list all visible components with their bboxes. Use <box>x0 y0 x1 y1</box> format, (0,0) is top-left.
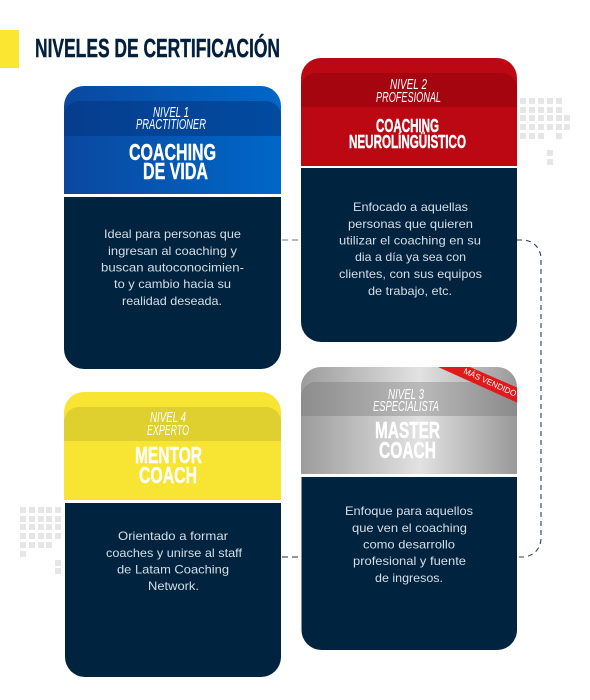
level 2 name: COACHING <box>376 116 439 136</box>
level 4 band <box>64 407 281 441</box>
level 1 label <box>136 104 206 133</box>
level 1 body panel <box>64 197 281 369</box>
yellow title marker <box>0 30 19 68</box>
panel: level 4 experto <box>64 392 281 677</box>
level 1 description: to y cambio hacia su <box>114 278 231 291</box>
dashed connector: level 3 to level 4 <box>282 556 301 558</box>
level 4 body panel <box>65 503 281 677</box>
level 4 description: Orientado a formar <box>118 530 228 543</box>
level 2 label <box>376 76 441 106</box>
level 1 header <box>64 86 281 194</box>
level 2 body panel <box>301 168 517 342</box>
level 4 label: NIVEL 4 <box>150 409 186 426</box>
level 2 description: Enfocado a aquellas <box>353 201 468 214</box>
level 3 description: que ven el coaching <box>352 522 467 535</box>
level 4 description: Network. <box>148 580 199 593</box>
level 3 name: MASTER <box>375 417 440 443</box>
level 3 label: NIVEL 3 <box>388 386 424 403</box>
level 3 label <box>373 386 439 415</box>
level 2 description <box>339 201 482 298</box>
level 2 description: clientes, con sus equipos <box>339 268 482 281</box>
panel: level 3 especialista <box>301 366 518 650</box>
level 1 description: buscan autoconocimien- <box>101 262 244 274</box>
level 1 name: DE VIDA <box>143 158 208 184</box>
level 3 label: ESPECIALISTA <box>373 398 439 415</box>
best seller ribbon <box>438 366 518 403</box>
level 4 description: de Latam Coaching <box>117 564 229 576</box>
level 1 name: COACHING <box>129 139 216 165</box>
level 1 description: ingresan al coaching y <box>108 245 237 258</box>
level 4 label <box>147 409 189 439</box>
panel: level 2 profesional <box>301 58 517 342</box>
level 4 header <box>64 392 281 500</box>
level 3 body panel <box>302 477 517 650</box>
best seller ribbon: MÁS VENDIDO <box>462 366 518 398</box>
level 2 description: de trabajo, etc. <box>368 285 452 298</box>
level 3 description: profesional y fuente <box>353 555 466 568</box>
level 1 description: realidad deseada. <box>122 295 222 308</box>
panel: level 1 practitioner <box>64 86 281 369</box>
level 1 label: PRACTITIONER <box>136 116 206 133</box>
level 3 name <box>375 417 440 463</box>
level 1 band <box>64 101 281 136</box>
level 3 band <box>301 382 517 416</box>
level 2 name: NEUROLÍNGÜISTICO <box>349 131 466 152</box>
level 2 name <box>349 116 466 152</box>
level 2 label: PROFESIONAL <box>376 89 441 106</box>
level 4 name: MENTOR <box>135 442 202 468</box>
level 1 name <box>129 139 216 184</box>
level 4 description: coaches y unirse al staff <box>106 547 243 560</box>
level 1 description <box>101 228 244 308</box>
level 3 name: COACH <box>379 437 436 463</box>
dot pattern: top right <box>520 98 570 165</box>
level 2 description: personas que quieren <box>348 218 473 231</box>
level 3 description: de ingresos. <box>375 572 443 585</box>
level 3 description <box>345 505 473 585</box>
dashed connector: level 1 to level 2 <box>282 239 301 241</box>
level 2 band <box>301 73 517 107</box>
level 4 label: EXPERTO <box>147 422 189 439</box>
title: NIVELES DE CERTIFICACIÓN <box>35 33 280 63</box>
level 1 description: Ideal para personas que <box>104 228 241 241</box>
level 3 header <box>301 367 517 474</box>
dashed connector: level 2 to level 3 <box>517 240 541 557</box>
level 4 name: COACH <box>139 462 197 488</box>
level 2 header <box>301 58 517 166</box>
level 4 name <box>135 442 202 488</box>
level 2 label: NIVEL 2 <box>390 76 427 93</box>
level 4 description <box>106 530 243 593</box>
level 3 description: como desarrollo <box>363 538 456 552</box>
dot pattern: bottom left <box>20 507 61 574</box>
level 2 description: utilizar el coaching en su <box>339 234 481 248</box>
level 3 description: Enfoque para aquellos <box>345 505 473 518</box>
level 1 label: NIVEL 1 <box>153 104 189 121</box>
level 2 description: dia a día ya sea con <box>355 251 466 264</box>
